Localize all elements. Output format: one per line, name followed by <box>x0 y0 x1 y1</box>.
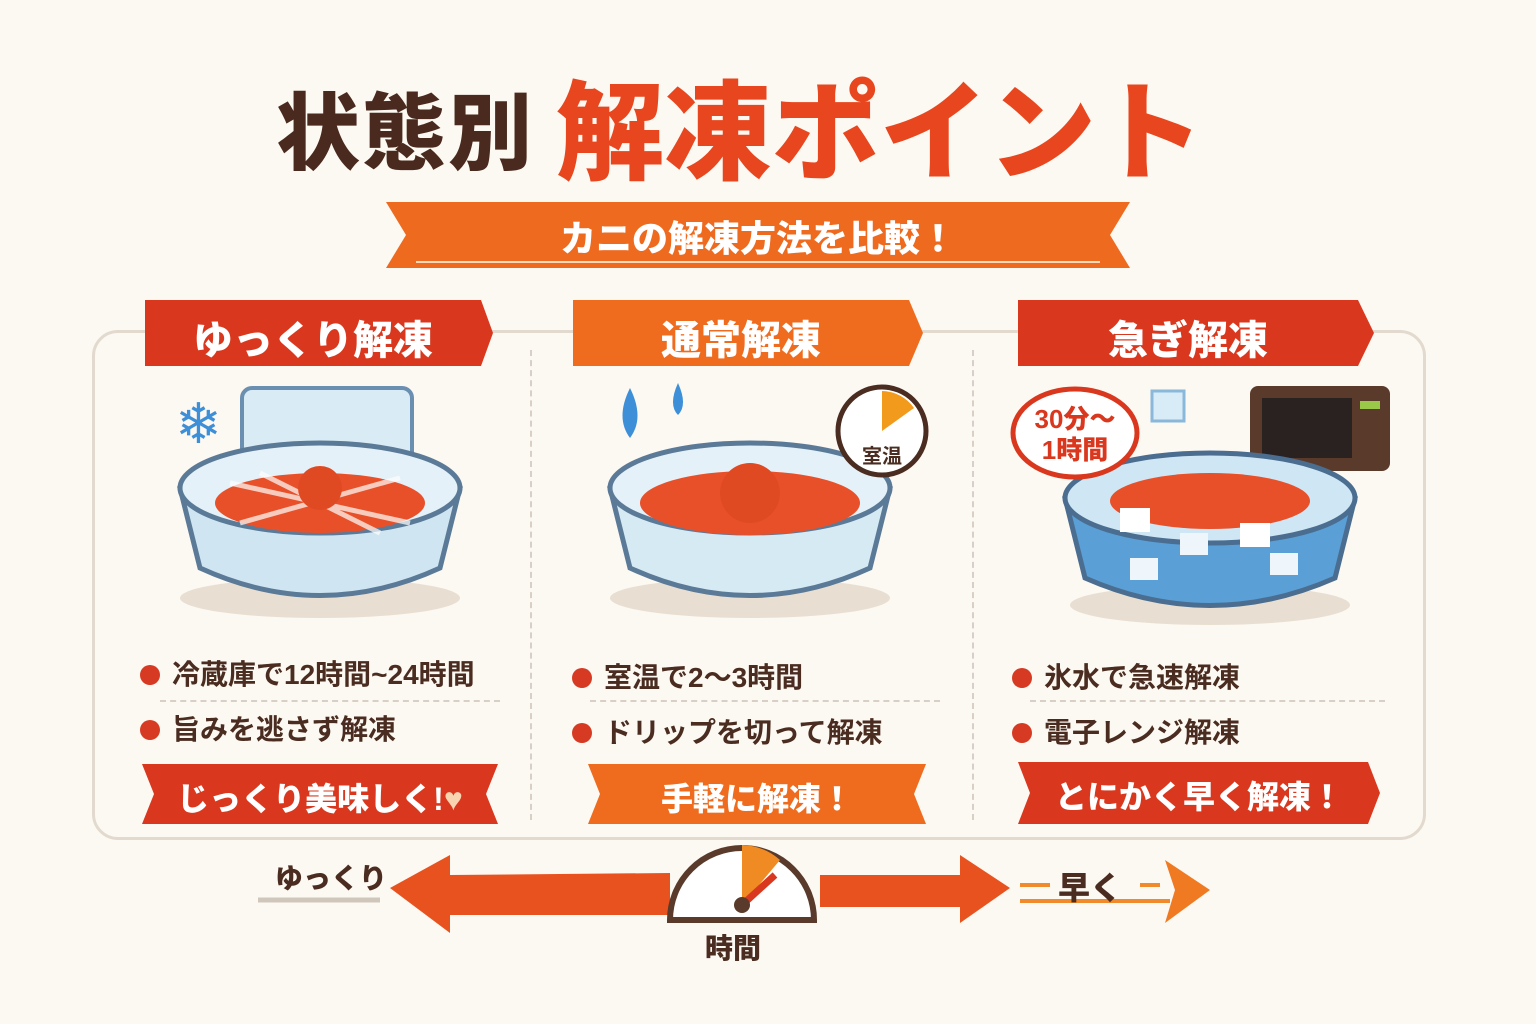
heading: normal: 通常解凍 <box>661 319 821 363</box>
title: 状態別解凍ポイント <box>276 73 1204 194</box>
main panel <box>92 330 1426 840</box>
label: time: 時間 <box>705 933 761 964</box>
heading: fast: 急ぎ解凍 <box>1108 319 1268 363</box>
panel: fast: 氷水で急速解凍 <box>1044 662 1240 693</box>
panel: fast: 電子レンジ解凍 <box>1044 717 1240 748</box>
tagline: fast: とにかく早く解凍！ <box>1055 779 1343 815</box>
illustration: room temp bowl <box>607 383 928 618</box>
tagline: fast <box>1018 762 1380 824</box>
tagline: slow: じっくり美味しく!♥ <box>177 781 463 817</box>
label: slow: ゆっくり <box>275 863 387 894</box>
panel: normal: ドリップを切って解凍 <box>604 717 883 748</box>
illustration: ice water bowl <box>1010 386 1390 625</box>
panel: slow <box>140 300 500 824</box>
illustration: fridge bowl <box>175 386 463 618</box>
illustration: ice water bowl: 30分～ <box>1035 404 1115 434</box>
subtitle ribbon <box>386 202 1130 268</box>
panel: normal <box>572 300 940 824</box>
subtitle ribbon: カニの解凍方法を比較！ <box>560 218 956 259</box>
time scale arrow <box>258 845 1210 964</box>
tagline: slow <box>142 764 498 824</box>
heading: slow <box>145 300 493 366</box>
label: fast: 早く <box>1058 870 1122 906</box>
panel: normal: 室温で2～3時間 <box>604 662 803 693</box>
illustration: fridge bowl: ❄ <box>175 392 222 455</box>
illustration: ice water bowl: 1時間 <box>1042 435 1108 465</box>
panel: slow: 旨みを逃さず解凍 <box>172 714 396 745</box>
heading: normal <box>573 300 923 366</box>
illustration: room temp bowl: 室温 <box>862 445 902 468</box>
tagline: normal <box>588 764 926 824</box>
tagline: normal: 手軽に解凍！ <box>661 781 853 817</box>
heading: slow: ゆっくり解凍 <box>193 319 433 363</box>
panel: slow: 冷蔵庫で12時間~24時間 <box>172 659 475 690</box>
panel: fast <box>1010 300 1390 824</box>
heading: fast <box>1018 300 1374 366</box>
